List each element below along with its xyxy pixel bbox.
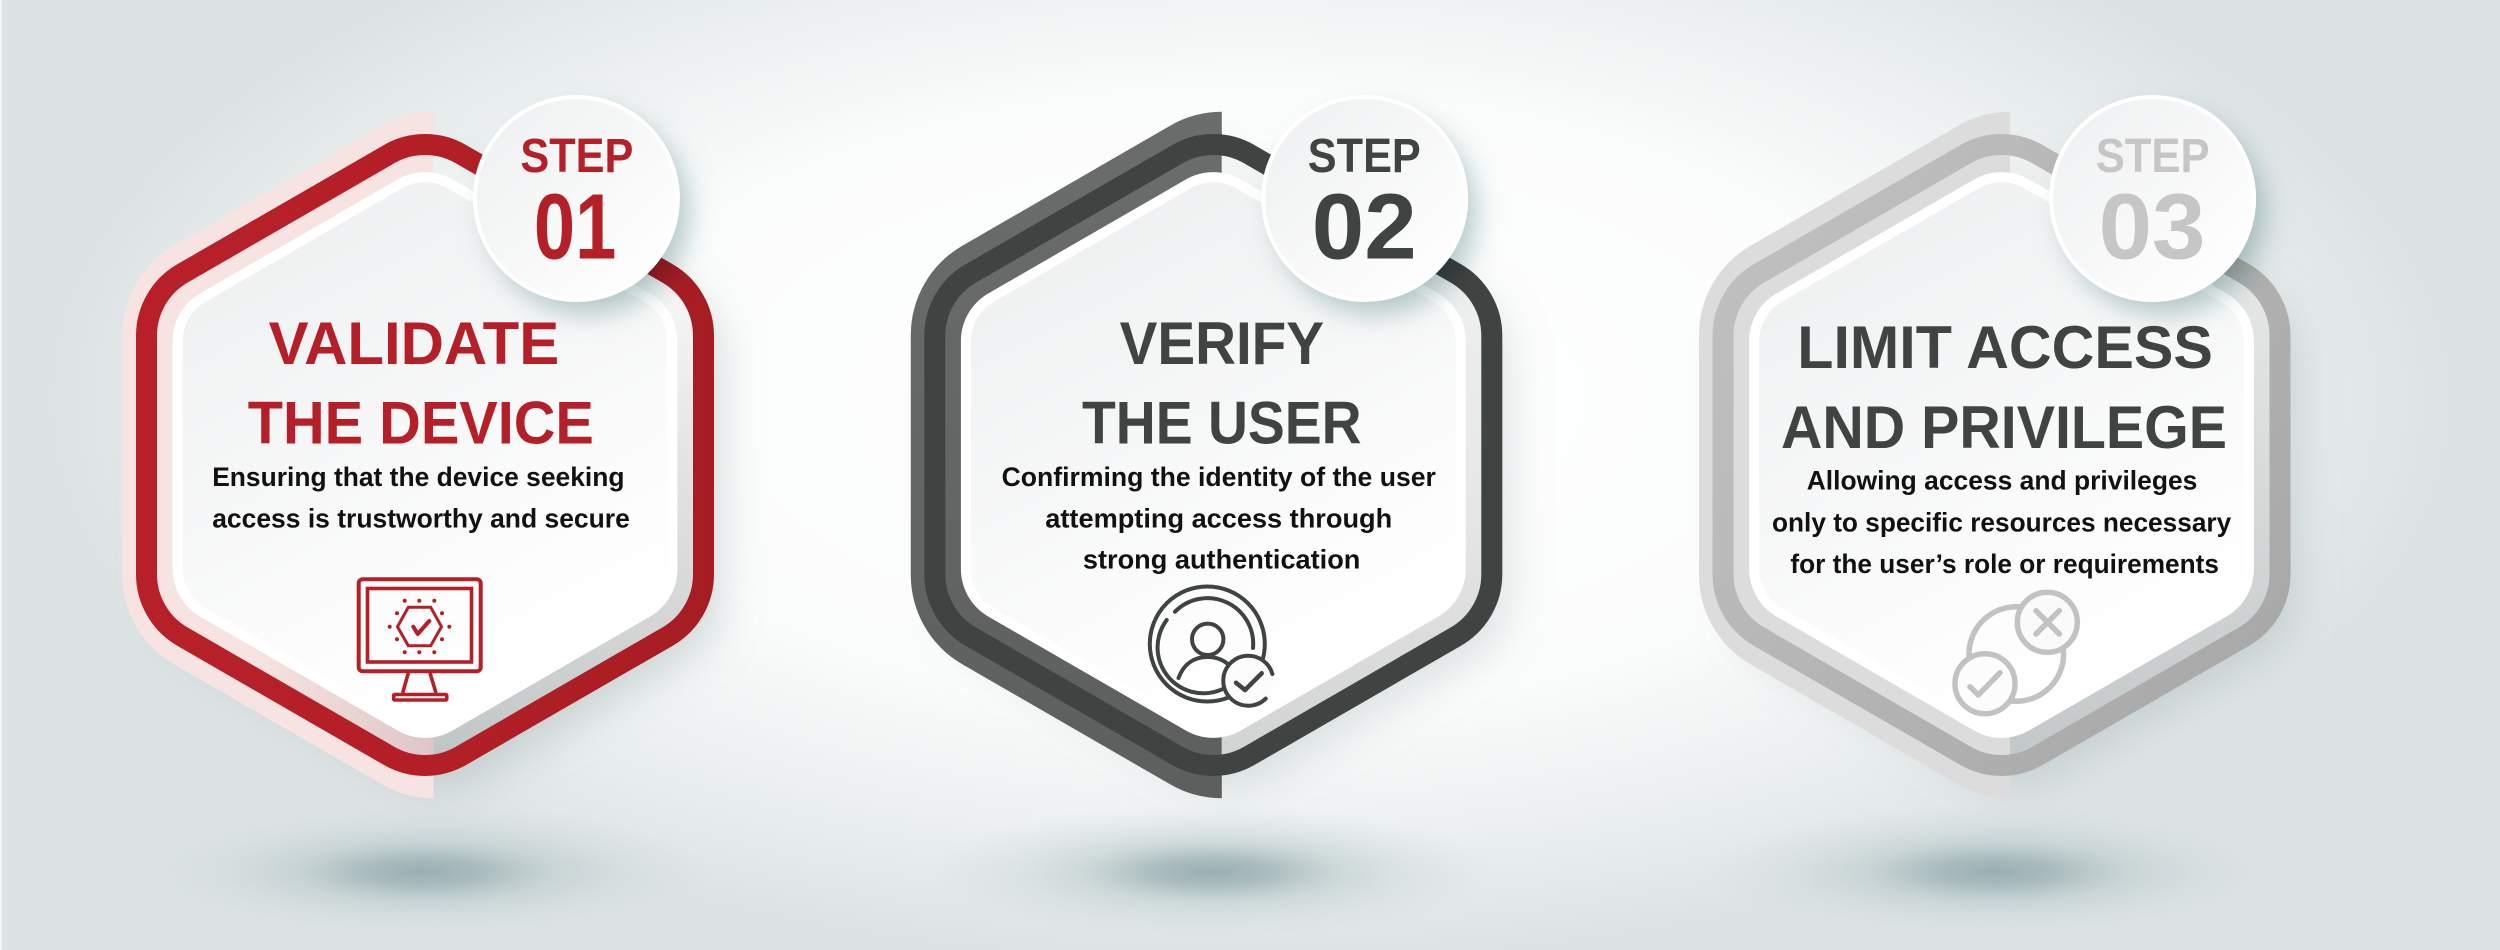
heading 1: THE DEVICE [248,389,594,456]
description 1: Ensuring that the device seeking [212,462,624,492]
step badge 3 [2051,97,2264,313]
hexagon frame 1 [122,112,720,798]
floor shadow 3 [1705,804,2285,940]
heading 3: AND PRIVILEGE [1781,394,2227,461]
hexagon frame 3 [1699,112,2296,798]
step badge 3: STEP [2096,130,2210,183]
icon: monitor with verified hexagon [359,579,481,700]
heading 3 [1781,314,2227,461]
step badge 2: 02 [1312,174,1417,278]
description 3: only to specific resources necessary [1772,508,2231,538]
heading 3: LIMIT ACCESS [1797,314,2213,381]
description 1: access is trustworthy and secure [212,503,630,533]
heading 2 [1082,310,1362,456]
step badge 1: 01 [534,174,616,278]
description 1 [212,462,630,533]
heading 1: VALIDATE [269,310,559,377]
panel: step 3 limit access and privilege [1699,97,2296,798]
step badge 2: STEP [1308,130,1421,183]
floor shadow 1 [133,804,713,940]
panel: step 2 verify the user [911,97,1508,798]
step badge 1 [475,97,688,313]
heading 2: VERIFY [1120,310,1324,377]
description 2: attempting access through [1045,503,1392,533]
description 3: for the user’s role or requirements [1790,549,2219,579]
description 2: strong authentication [1083,544,1360,574]
step badge 3: 03 [2099,174,2206,278]
icon: verified user [1150,586,1273,706]
hexagon frame 2 [911,112,1508,798]
heading 1 [248,310,594,456]
description 3: Allowing access and privileges [1807,466,2197,496]
description 3 [1772,466,2231,579]
icon: allow and deny circles [1955,592,2077,714]
panel: step 1 validate the device [122,97,720,798]
step badge 2 [1263,97,1476,313]
floor shadow 2 [922,804,1502,940]
step badge 1: STEP [520,130,633,183]
description 2: Confirming the identity of the user [1002,462,1436,492]
heading 2: THE USER [1082,389,1362,456]
description 2 [1002,462,1436,574]
